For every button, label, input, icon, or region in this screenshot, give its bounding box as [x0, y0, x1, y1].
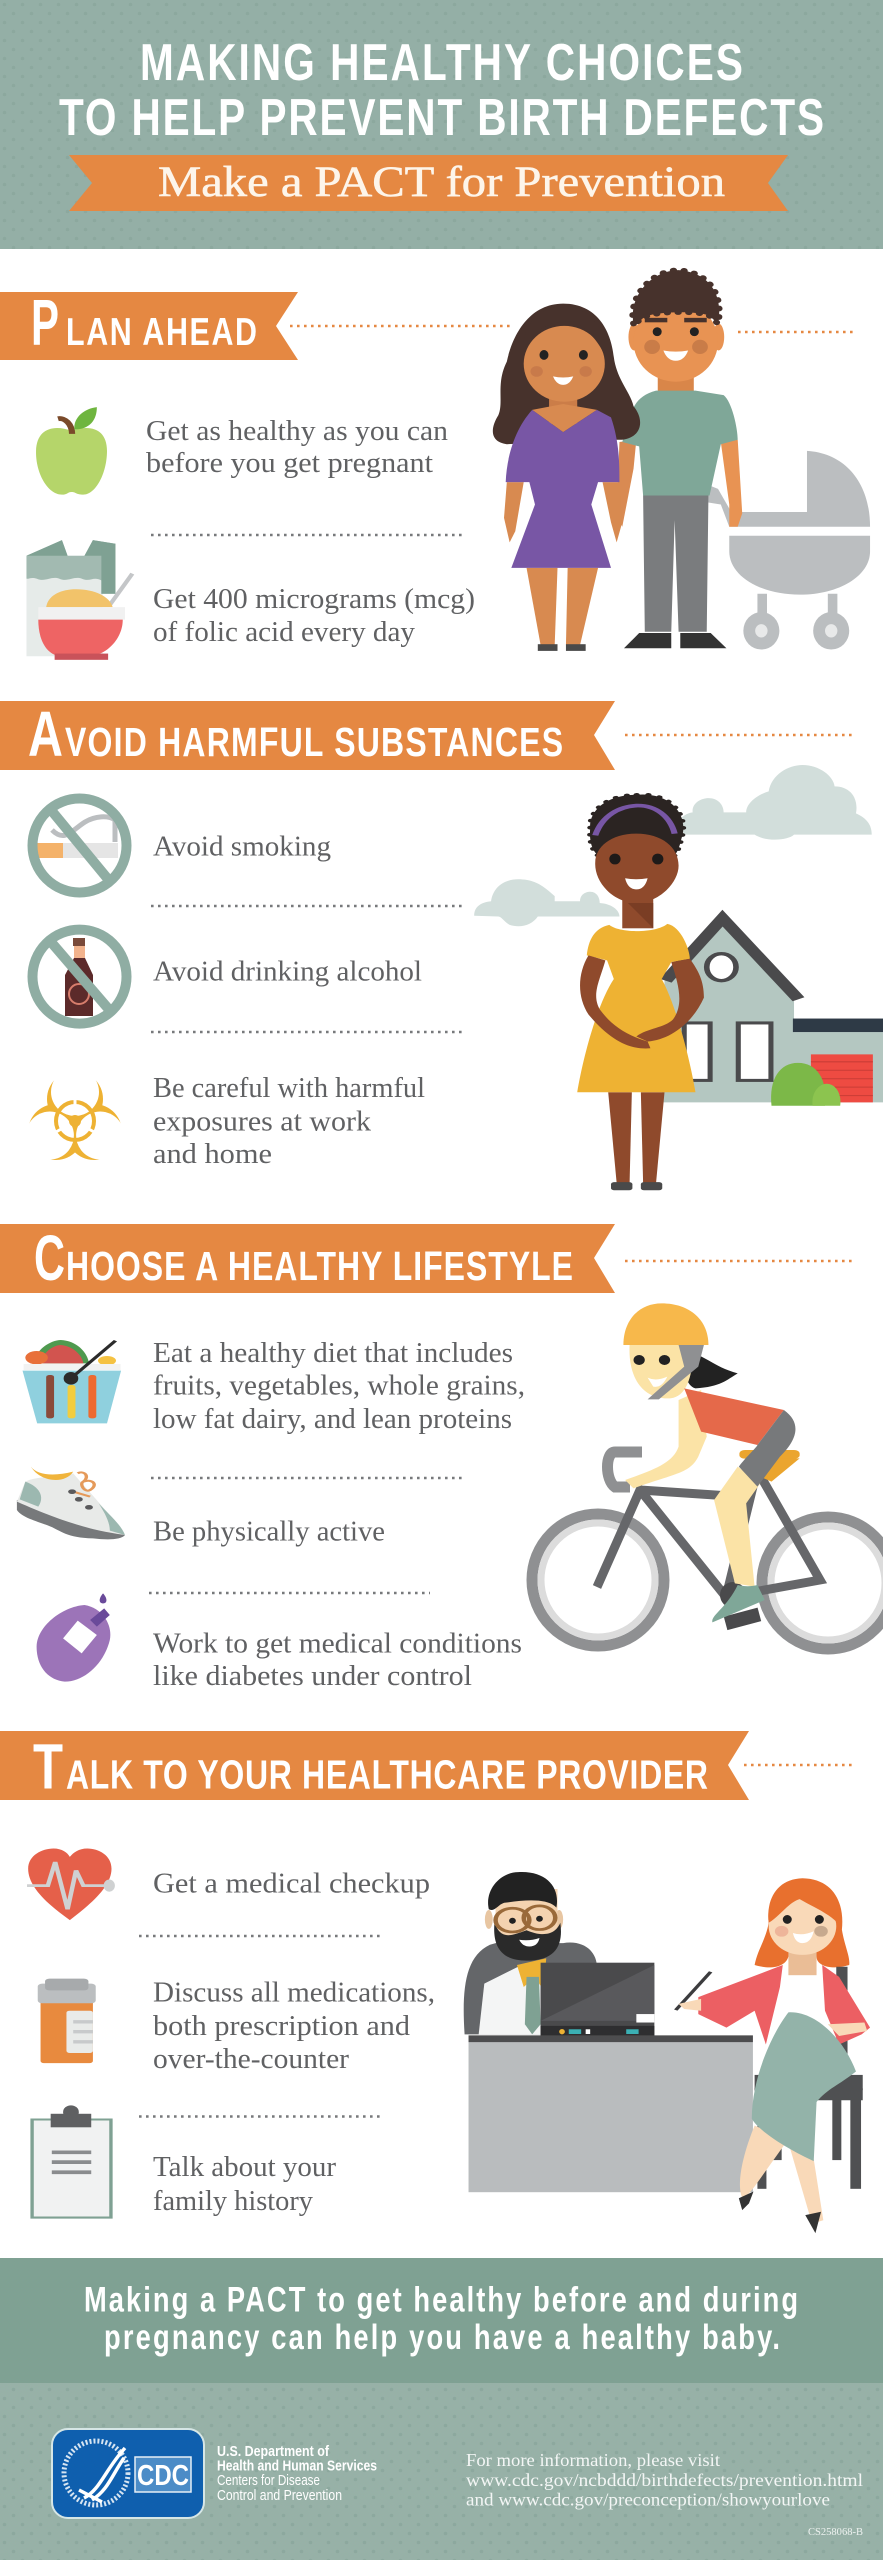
text: get healthy: Get as healthy as you can — [146, 416, 448, 447]
text: family history: family history — [153, 2186, 313, 2217]
section heading: talk to your healthcare provider: ALK TO YOUR HEALTHCARE PROVIDER — [66, 1752, 708, 1798]
logo: HHS and CDC — [52, 2429, 204, 2518]
icon: glucose meter — [37, 1593, 110, 1682]
title: TO HELP PREVENT BIRTH DEFECTS — [59, 88, 824, 146]
text: avoid smoking: Avoid smoking — [153, 832, 331, 863]
text: harmful exposures: and home — [153, 1139, 272, 1170]
agency name: Centers for Disease — [217, 2473, 320, 2489]
title — [59, 33, 824, 146]
patient — [676, 1878, 870, 2233]
illustration: doctor and patient at desk — [464, 1872, 870, 2233]
section heading: choose a healthy lifestyle: HOOSE A HEALTHY LIFESTYLE — [66, 1243, 573, 1289]
text: medications: over-the-counter — [153, 2044, 350, 2075]
text: healthy diet: low fat dairy, and lean proteins — [153, 1404, 512, 1435]
section heading: plan ahead: LAN AHEAD — [66, 310, 257, 354]
icon: clipboard — [32, 2105, 111, 2218]
text: physically active: Be physically active — [153, 1517, 385, 1548]
text: medical conditions — [153, 1629, 522, 1692]
closing message banner — [0, 2258, 883, 2383]
section heading: talk to your healthcare provider: T — [33, 1731, 63, 1803]
icon: no smoking — [32, 798, 126, 892]
logo: HHS and CDC: CDC — [137, 2460, 189, 2492]
text: medical checkup: Get a medical checkup — [153, 1868, 430, 1899]
publication code: CS258068-B — [808, 2527, 863, 2538]
footer panel — [0, 2383, 883, 2560]
text: family history — [153, 2152, 337, 2217]
text: harmful exposures: exposures at work — [153, 1106, 371, 1138]
clouds — [474, 765, 872, 926]
icon: fruit basket — [23, 1340, 121, 1423]
subtitle ribbon — [69, 155, 788, 211]
rider — [623, 1303, 800, 1622]
section heading: avoid harmful substances — [0, 698, 615, 770]
text: medical conditions: Work to get medical conditions — [153, 1629, 522, 1660]
section heading: talk to your healthcare provider — [0, 1731, 749, 1803]
section heading: avoid harmful substances: VOID HARMFUL SUBSTANCES — [65, 719, 563, 765]
text: folic acid — [153, 584, 475, 648]
more information: www.cdc.gov/ncbddd/birthdefects/prevention.html — [466, 2470, 863, 2490]
more information: For more information, please visit — [466, 2450, 720, 2470]
icon: sneaker — [17, 1467, 125, 1539]
more information — [466, 2450, 863, 2510]
text: medications: both prescription and — [153, 2011, 410, 2042]
text: healthy diet: fruits, vegetables, whole grains, — [153, 1371, 525, 1402]
text: medications: Discuss all medications, — [153, 1978, 435, 2009]
icon: pill bottle — [38, 1979, 96, 2063]
subtitle ribbon: Make a PACT for Prevention — [158, 159, 725, 206]
woman — [577, 794, 704, 1190]
section heading: choose a healthy lifestyle: C — [34, 1222, 65, 1294]
agency name — [217, 2444, 377, 2504]
computer — [541, 1963, 654, 2036]
text: family history: Talk about your — [153, 2152, 337, 2183]
section heading: choose a healthy lifestyle — [0, 1222, 615, 1294]
closing message banner: Making a PACT to get healthy before and during — [84, 2280, 798, 2320]
closing message banner: pregnancy can help you have a healthy baby. — [104, 2318, 780, 2357]
illustration: pregnant woman, house and clouds — [474, 765, 883, 1190]
icon: apple — [36, 407, 107, 495]
agency name: Control and Prevention — [217, 2488, 342, 2504]
text: avoid alcohol: Avoid drinking alcohol — [153, 957, 422, 988]
man — [617, 270, 742, 648]
house — [662, 918, 883, 1106]
title: MAKING HEALTHY CHOICES — [140, 33, 743, 91]
text: harmful exposures: Be careful with harmful — [153, 1073, 425, 1104]
section heading: plan ahead — [0, 286, 298, 360]
stroller — [707, 451, 870, 650]
text: get healthy: before you get pregnant — [146, 448, 433, 479]
icon: cereal box and bowl — [26, 540, 132, 660]
more information: and www.cdc.gov/preconception/showyourlove — [466, 2490, 830, 2510]
bicycle — [532, 1452, 883, 1649]
section heading: avoid harmful substances: A — [28, 698, 63, 770]
header panel — [0, 0, 883, 249]
text: medical conditions: like diabetes under control — [153, 1661, 472, 1692]
illustration: cyclist — [532, 1303, 883, 1649]
text: medications — [153, 1978, 435, 2075]
icon: heart with pulse — [27, 1848, 115, 1920]
text: harmful exposures — [153, 1073, 425, 1170]
text: folic acid: of folic acid every day — [153, 617, 415, 648]
section heading: plan ahead: P — [31, 286, 59, 359]
illustration: couple with stroller — [493, 270, 870, 651]
text: folic acid: Get 400 micrograms (mcg) — [153, 584, 475, 615]
text: get healthy — [146, 416, 448, 479]
desk — [469, 2035, 753, 2192]
agency name: U.S. Department of — [217, 2444, 329, 2460]
text: healthy diet — [153, 1338, 525, 1435]
doctor — [464, 1872, 597, 2034]
woman — [493, 304, 640, 651]
icon: no alcohol — [32, 930, 126, 1024]
text: healthy diet: Eat a healthy diet that includes — [153, 1338, 513, 1369]
icon: biohazard — [17, 1068, 133, 1170]
agency name: Health and Human Services — [217, 2459, 377, 2475]
